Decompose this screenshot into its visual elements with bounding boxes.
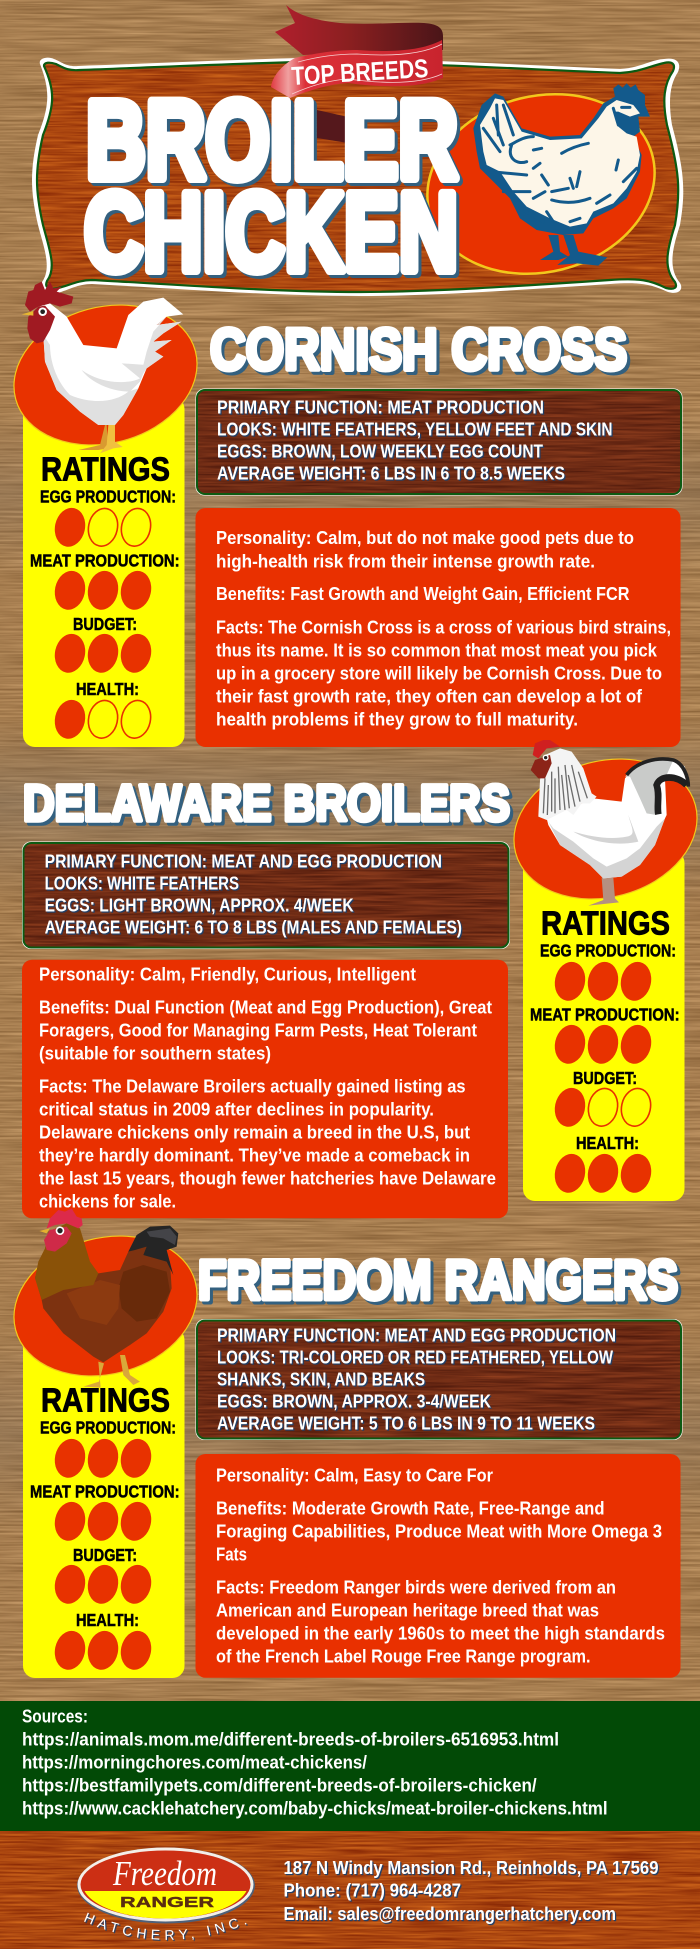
description text: Facts: Freedom Ranger birds were derived from an (216, 1577, 616, 1597)
description text: Foraging Capabilities, Produce Meat with More Omega 3 (216, 1521, 662, 1541)
sources text: https://www.cacklehatchery.com/baby-chicks/meat-broiler-chickens.html (22, 1799, 608, 1819)
ribbon shadow (317, 110, 348, 143)
sources text: Sources: (22, 1706, 88, 1726)
key facts text: SHANKS, SKIN, AND BEAKS (217, 1369, 425, 1389)
description text: health problems if they grow to full maturity. (216, 709, 578, 729)
description text: developed in the early 1960s to meet the high standards (216, 1623, 665, 1643)
key facts text: PRIMARY FUNCTION: MEAT AND EGG PRODUCTION (217, 1325, 616, 1345)
rating: budget: BUDGET: (73, 614, 137, 634)
logo: Freedom Ranger Hatchery (77, 1848, 255, 1942)
rating: health: HEALTH: (576, 1133, 639, 1153)
key facts text: PRIMARY FUNCTION: MEAT AND EGG PRODUCTION (45, 851, 442, 871)
ribbon band (271, 40, 443, 98)
section: Delaware Broilers ratings panel (498, 739, 700, 1201)
description text (216, 528, 671, 729)
panel: Delaware description (22, 960, 508, 1218)
key facts text (217, 397, 612, 483)
key facts text (217, 1325, 616, 1433)
description text: they’re hardly dominant. They’ve made a comeback in (39, 1146, 470, 1166)
panel: Freedom Rangers key facts (196, 1319, 682, 1440)
description text: Benefits: Fast Growth and Weight Gain, Efficient FCR (216, 584, 630, 604)
sources text (22, 1706, 608, 1819)
description text: up in a grocery store will likely be Cornish Cross. Due to (216, 663, 662, 683)
ribbon tail (275, 5, 443, 55)
description text (39, 965, 496, 1212)
section: Freedom Rangers ratings panel (0, 1216, 213, 1678)
logo script: Freedom (112, 1854, 217, 1893)
rating: health (51, 679, 154, 742)
description text: high-health risk from their intense growth rate. (216, 551, 595, 571)
sources text: https://morningchores.com/meat-chickens/ (22, 1753, 367, 1773)
red circle (498, 739, 700, 919)
description text (216, 1466, 665, 1666)
ratings heading: RATINGS (41, 1382, 170, 1419)
rating: egg production: EGG PRODUCTION: (40, 1418, 176, 1438)
contact details: Email: sales@freedomrangerhatchery.com (284, 1904, 616, 1924)
rating: meat production: MEAT PRODUCTION: (30, 1482, 180, 1502)
sources band (0, 1701, 700, 1831)
description text: the last 15 years, though fewer hatcheries have Delaware (39, 1169, 496, 1189)
rating: budget (51, 614, 155, 676)
yellow panel (23, 397, 184, 747)
panel: Freedom Rangers description (196, 1454, 680, 1678)
icon: white rooster (22, 282, 183, 453)
description text: Personality: Calm, Easy to Care For (216, 1466, 493, 1486)
footer band (0, 1831, 700, 1949)
sources text: https://animals.mom.me/different-breeds-of-broilers-6516953.html (22, 1729, 559, 1749)
rating: meat production (30, 551, 180, 613)
rating: health (551, 1133, 655, 1196)
icon: brown rooster (35, 1208, 178, 1388)
rating: health: HEALTH: (76, 1610, 139, 1630)
rating: health (51, 1610, 155, 1673)
description text: Facts: The Delaware Broilers actually gained listing as (39, 1077, 466, 1097)
description text: Personality: Calm, but do not make good pets due to (216, 528, 634, 548)
ribbon banner (271, 5, 443, 98)
rating: egg production: EGG PRODUCTION: (40, 487, 176, 507)
red circle (0, 1216, 213, 1396)
main title (84, 79, 458, 294)
description text: thus its name. It is so common that most meat you pick (216, 641, 658, 661)
yellow panel (23, 1328, 184, 1678)
header red circle (408, 71, 674, 297)
contact details: Phone: (717) 964-4287 (284, 1881, 461, 1901)
description text: American and European heritage breed that was (216, 1600, 599, 1620)
description text: their fast growth rate, they often can develop a lot of (216, 686, 643, 706)
red circle (0, 285, 213, 465)
description text: of the French Label Rouge Free Range program. (216, 1646, 591, 1666)
key facts text: AVERAGE WEIGHT: 6 TO 8 LBS (MALES AND FEMALES) (45, 917, 462, 937)
rating: budget (51, 1545, 155, 1607)
key facts text: AVERAGE WEIGHT: 5 TO 6 LBS IN 9 TO 11 WEEKS (217, 1413, 595, 1433)
key facts text: LOOKS: TRI-COLORED OR RED FEATHERED, YELLOW (217, 1347, 613, 1367)
key facts text: AVERAGE WEIGHT: 6 LBS IN 6 TO 8.5 WEEKS (217, 463, 565, 483)
title line: Chicken: CHICKEN (84, 171, 458, 294)
rating: meat production: MEAT PRODUCTION: (30, 551, 180, 571)
sources text: https://bestfamilypets.com/different-breeds-of-broilers-chicken/ (22, 1776, 537, 1796)
key facts text (45, 851, 462, 937)
heading: Delaware Broilers: DELAWARE BROILERS (23, 774, 510, 832)
rating: meat production (30, 1482, 180, 1544)
ratings heading: RATINGS (541, 905, 670, 942)
description text: Delaware chickens only remain a breed in the U.S, but (39, 1123, 470, 1143)
rating: egg production (40, 487, 176, 550)
logo word: RANGER (120, 1894, 214, 1911)
title line: Broiler: BROILER (86, 79, 458, 202)
section: Cornish Cross ratings panel (0, 282, 213, 747)
header plaque (32, 58, 683, 296)
yellow panel (523, 851, 684, 1201)
rating: budget: BUDGET: (73, 1545, 137, 1565)
rating: budget (551, 1068, 654, 1130)
description text: critical status in 2009 after declines in popularity. (39, 1100, 434, 1120)
description text: Foragers, Good for Managing Farm Pests, Heat Tolerant (39, 1021, 477, 1041)
key facts text: EGGS: BROWN, LOW WEEKLY EGG COUNT (217, 441, 543, 461)
key facts text: EGGS: LIGHT BROWN, APPROX. 4/WEEK (45, 895, 354, 915)
contact details (284, 1858, 658, 1924)
logo curved text: HATCHERY, INC. (84, 1912, 248, 1942)
ratings heading: RATINGS (41, 451, 170, 488)
key facts text: LOOKS: WHITE FEATHERS (45, 873, 239, 893)
description text: Benefits: Moderate Growth Rate, Free-Range and (216, 1498, 604, 1518)
rating: egg production (540, 941, 676, 1004)
contact details: 187 N Windy Mansion Rd., Reinholds, PA 17569 (284, 1858, 658, 1878)
icon: Delaware rooster (531, 740, 688, 906)
rating: budget: BUDGET: (573, 1068, 637, 1088)
icon: header hen (473, 83, 650, 266)
key facts text: LOOKS: WHITE FEATHERS, YELLOW FEET AND SKIN (217, 419, 612, 439)
panel: Cornish Cross key facts (196, 388, 682, 496)
description text: Fats (216, 1544, 247, 1564)
rating: meat production (530, 1005, 680, 1067)
description text: Personality: Calm, Friendly, Curious, Intelligent (39, 965, 416, 985)
description text: (suitable for southern states) (39, 1043, 271, 1063)
rating: egg production (40, 1418, 176, 1481)
ribbon text: TOP BREEDS (291, 53, 429, 91)
heading: Cornish Cross: CORNISH CROSS (210, 318, 627, 382)
key facts text: EGGS: BROWN, APPROX. 3-4/WEEK (217, 1391, 491, 1411)
description text: chickens for sale. (39, 1192, 176, 1212)
description text: Benefits: Dual Function (Meat and Egg Production), Great (39, 997, 492, 1017)
panel: Delaware key facts (22, 842, 510, 949)
rating: health: HEALTH: (76, 679, 139, 699)
panel: Cornish Cross description (196, 508, 680, 747)
key facts text: PRIMARY FUNCTION: MEAT PRODUCTION (217, 397, 544, 417)
